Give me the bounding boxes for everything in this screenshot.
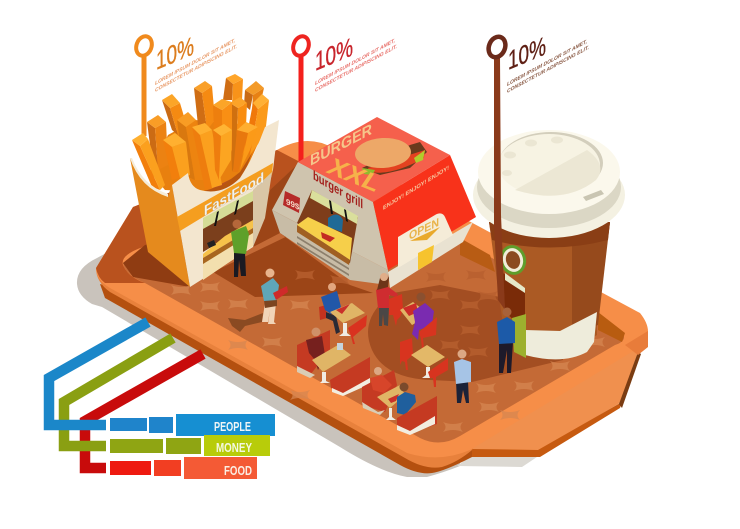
coffee cup stall [473, 30, 625, 359]
callout: red 10% [291, 31, 397, 166]
till [207, 240, 216, 248]
brown pin [486, 34, 508, 310]
burger window [297, 190, 358, 263]
tray mid band [96, 268, 500, 468]
burger icon [354, 137, 427, 175]
open door: OPEN [409, 215, 439, 243]
tray inner floor [123, 162, 624, 443]
legend: money: MONEY [216, 441, 253, 455]
table top [330, 303, 365, 323]
chair back left [389, 294, 403, 326]
person: green shirt man [231, 220, 249, 277]
burger title: BURGER [310, 121, 372, 170]
legend connector lines [49, 322, 203, 468]
cup and burger shadow [368, 285, 563, 382]
tray shadow [77, 240, 460, 477]
chair right [428, 358, 448, 387]
table top [312, 345, 351, 372]
chair front [419, 317, 437, 349]
box left face [130, 158, 190, 287]
inner rim right [598, 312, 625, 342]
table with purple shirt person [389, 292, 437, 349]
brown description: CONSECTETUR ADIPISCING ELIT. [507, 45, 589, 95]
table with red chairs [400, 338, 448, 387]
leg [422, 367, 434, 378]
lower right base [388, 222, 473, 288]
tray foot shadow [457, 455, 537, 467]
chair [319, 305, 327, 320]
burger counter [297, 217, 352, 260]
blue shirt person [397, 382, 416, 415]
person: man carrying tray [228, 268, 288, 332]
callout: orange 10% [134, 30, 237, 136]
person [412, 292, 434, 340]
red description: CONSECTETUR ADIPISCING ELIT. [315, 44, 397, 94]
red description: LOREM IPSUM DOLOR SIT AMET, [315, 38, 395, 87]
tray right rim thickness [625, 331, 648, 355]
tray foot edge [472, 402, 622, 457]
shadow of fries box [123, 230, 200, 287]
orange stripe [177, 163, 273, 231]
tray foot [455, 330, 638, 451]
man [306, 328, 325, 370]
orange shirt person [370, 367, 392, 393]
burger vendor [328, 214, 343, 232]
burger awning [310, 190, 358, 224]
legend: people [110, 414, 275, 436]
table with blue shirt man [319, 283, 367, 344]
booth right [330, 357, 370, 395]
booth table with maroon shirt man [297, 328, 370, 396]
food line [85, 354, 203, 468]
legend [110, 414, 275, 479]
legend: food: FOOD [224, 464, 252, 478]
price tag [283, 191, 300, 213]
leg [339, 323, 351, 336]
booth left [362, 370, 397, 412]
people line [49, 322, 148, 425]
legend: people: PEOPLE [214, 420, 251, 434]
window [203, 192, 253, 252]
floor stars [171, 282, 605, 432]
cup right shade [572, 222, 610, 331]
standing man light blue [454, 350, 471, 403]
base line [297, 236, 349, 276]
left face [272, 162, 388, 270]
floor stars in shadow [295, 270, 498, 357]
top face [298, 117, 450, 202]
cup sleeve [525, 312, 597, 359]
side panel by window [253, 172, 272, 247]
table top [377, 385, 405, 408]
box front face [172, 120, 279, 287]
cup door [503, 273, 525, 330]
burger box stall [272, 117, 476, 288]
orange description: LOREM IPSUM DOLOR SIT AMET, [155, 38, 235, 87]
right face [373, 155, 476, 270]
lid [473, 130, 625, 238]
tray [96, 141, 648, 473]
xxl title: XXL [322, 154, 387, 197]
price tag: 99$ [286, 196, 300, 212]
open door [398, 213, 453, 268]
brown value: 10% [508, 30, 546, 76]
counter [203, 220, 253, 258]
legend: money [110, 435, 270, 456]
legend: food [110, 457, 257, 479]
booth right [397, 396, 437, 434]
burger grill title: burger grill [313, 167, 363, 212]
box rim curve [130, 158, 168, 197]
enjoy text: ENJOY! ENJOY! ENJOY! [383, 165, 449, 212]
table top [400, 302, 430, 325]
tray foot dark side [619, 352, 641, 408]
awning [203, 191, 253, 229]
cup door awning [505, 273, 525, 293]
leg [320, 372, 330, 383]
fries box stall [130, 74, 279, 287]
fastfood sign: FastFood [204, 170, 264, 220]
lower base [272, 210, 388, 285]
cup top shade [489, 222, 610, 248]
booth left [297, 330, 330, 375]
counter front stripes [203, 228, 253, 280]
far inner rim [460, 238, 495, 272]
orange description: CONSECTETUR ADIPISCING ELIT. [155, 44, 237, 94]
woman in red [376, 273, 398, 326]
booth table bottom [362, 367, 437, 435]
brown description: LOREM IPSUM DOLOR SIT AMET, [507, 39, 587, 88]
burger curtain ties [329, 200, 348, 222]
cup body [489, 222, 610, 351]
upper-left inner rim [96, 150, 300, 283]
floor shadow behind stalls [213, 162, 373, 297]
fries [132, 74, 269, 196]
coffee logo [497, 242, 529, 278]
red value: 10% [315, 31, 353, 77]
man [321, 283, 341, 334]
chair right [348, 315, 367, 344]
table top [411, 345, 445, 367]
blue shirt man at cup [497, 308, 515, 373]
orange value: 10% [156, 30, 194, 76]
tray rim [96, 141, 648, 457]
money line [64, 338, 173, 446]
cup door counter [512, 314, 526, 358]
curtain ties [214, 200, 239, 226]
orange pin [134, 34, 154, 136]
tray underside [100, 284, 472, 473]
yellow doormat [418, 245, 434, 270]
red pin [291, 34, 311, 166]
chair left [400, 338, 413, 370]
